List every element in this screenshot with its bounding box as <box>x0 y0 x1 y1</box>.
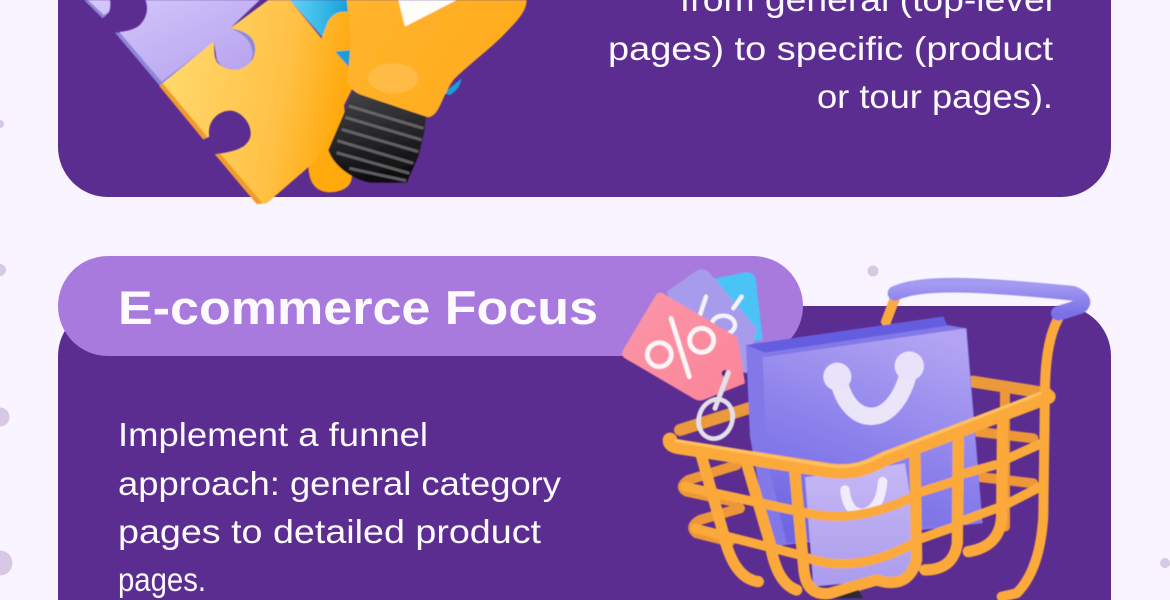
light bulb: screw base <box>328 92 426 183</box>
text block: top card description: pages) to specific (product <box>608 30 1053 67</box>
bag handle <box>823 351 924 416</box>
heading pill <box>58 256 803 356</box>
light bulb: glass <box>347 0 527 117</box>
discount tag marks <box>700 297 742 315</box>
heading: E-commerce Focus: E-commerce Focus <box>118 281 598 334</box>
text block: e-commerce description: Implement a funnel <box>118 416 428 453</box>
text block: e-commerce description: approach: general category <box>118 465 562 502</box>
cart: front basket wires <box>670 393 1048 594</box>
text block: top card description: or tour pages). <box>817 78 1053 115</box>
decorative dots <box>0 120 1170 576</box>
discount tag: lavender percent ring <box>712 316 735 334</box>
cart: back rim <box>680 382 1047 430</box>
tag hole <box>722 370 728 377</box>
puzzle piece: yellow <box>159 0 353 204</box>
light bulb: blue reflection <box>335 50 462 95</box>
cart: handle <box>895 285 1083 313</box>
discount tag: pink <box>622 292 745 401</box>
puzzle piece: blue <box>290 0 353 77</box>
panel: top purple card <box>58 0 1111 197</box>
puzzle piece: orange tab <box>308 100 352 192</box>
illustration: shopping cart with bag and tags <box>622 269 1083 598</box>
text block: top card description <box>608 0 1053 115</box>
cart: bottom frame <box>833 590 863 598</box>
cart: left and right posts <box>886 298 1058 597</box>
cart: rear lower wires <box>683 393 1033 542</box>
shopping bag: small <box>805 463 922 587</box>
light bulb: highlight <box>368 63 418 93</box>
panel: e-commerce purple card <box>58 306 1111 600</box>
puzzle piece: lavender <box>84 0 260 86</box>
discount tag: lavender <box>667 269 757 373</box>
illustration: puzzle pieces and light bulb <box>84 0 527 204</box>
text block: e-commerce description: pages. <box>118 561 206 598</box>
light bulb: white note <box>398 0 457 27</box>
tag string and ring <box>693 373 738 443</box>
shopping bag: large <box>746 317 983 547</box>
puzzle notch shadow <box>159 83 263 204</box>
discount tag: blue <box>715 272 763 345</box>
text block: e-commerce description <box>118 416 562 598</box>
text block: e-commerce description: pages to detailed product <box>118 513 541 550</box>
